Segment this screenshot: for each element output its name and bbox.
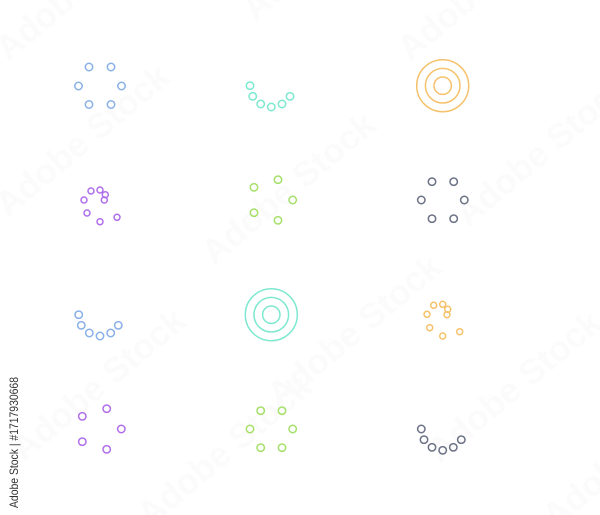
vertical stock credit text: Adobe Stock | #1717930668 — [7, 377, 21, 508]
icon: teal concentric circles — [245, 289, 297, 341]
watermark layer: Adobe Stock — [260, 246, 449, 414]
icon: orange dot spiral — [424, 301, 463, 339]
watermark layer: Adobe Stock — [194, 104, 383, 272]
icon: teal dot arc — [246, 82, 294, 111]
icon: gray dot ring — [418, 178, 468, 222]
icon: orange concentric circles — [417, 60, 469, 112]
watermark layer: Adobe Stock — [4, 300, 193, 468]
icon: gray dot arc — [418, 425, 465, 454]
icon: blue dot arc — [75, 311, 122, 340]
icon: green five-dot ring — [250, 176, 296, 224]
icon: purple five-dot ring — [79, 405, 125, 453]
icon: green dot ring — [246, 407, 296, 451]
icon: purple dot spiral — [81, 187, 120, 225]
icon: blue dot ring — [75, 63, 125, 108]
